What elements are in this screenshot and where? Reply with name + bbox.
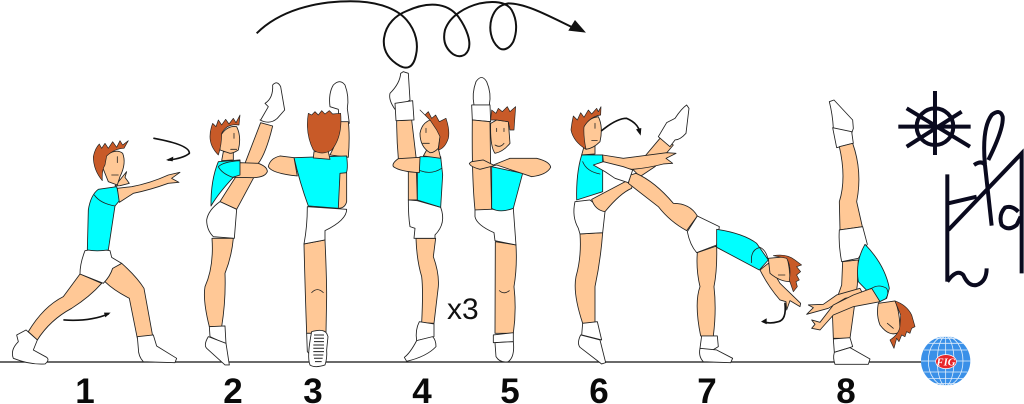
shorts [687,216,719,253]
facial lines [231,133,237,149]
sleeve seam [94,195,115,206]
hair [773,255,802,292]
far hand [115,172,129,186]
sock [582,322,602,340]
near arm [117,172,180,202]
standing foot [578,335,606,364]
back leg [28,274,102,340]
standing leg [697,246,717,336]
standing foot [404,337,436,361]
back shoe [12,330,48,364]
figure 1: lunge [12,138,189,364]
neck [313,152,330,159]
shorts [80,249,122,283]
raised thigh [592,177,633,212]
sock [209,326,226,344]
neck [582,145,595,155]
figure 2: leg raised, side view [204,83,285,365]
torso [492,167,523,211]
torso [294,156,347,208]
standing foot [205,337,229,365]
sock [472,105,491,122]
figure 5: front view with raised leg [469,77,551,362]
facial lines [112,157,118,175]
torso [717,229,768,270]
figure 6: stepping forward with raised leg [571,105,689,364]
raised leg [220,123,273,209]
turn arrow [602,118,641,136]
sock [700,336,718,352]
torso [857,244,889,302]
sock [395,101,414,121]
arm [760,263,801,310]
facial lines [423,128,429,143]
shorts [304,207,347,244]
FIG globe logo [921,336,970,386]
face [102,151,124,185]
standing leg [495,242,516,333]
raised leg [628,173,697,231]
facial line [887,323,893,328]
raised foot [473,77,490,105]
arm [233,163,267,178]
face [768,257,790,282]
knee line [312,290,323,293]
back of head [307,111,341,153]
hair [890,301,915,348]
hair [420,110,449,150]
standing leg [575,233,603,323]
near arm [812,288,880,330]
sock [493,333,513,343]
symbol: crossed wheel [898,91,971,155]
figure 4: side view with raised leg [390,72,449,361]
front leg [105,263,153,338]
hair [571,107,601,149]
raised leg [472,120,492,210]
upper foot [829,100,853,133]
raised leg [330,122,349,157]
hand rotation arrow [761,303,785,324]
far arm [807,288,863,314]
arm [393,157,420,173]
sleeve seam [583,162,600,174]
raised leg [397,120,417,200]
raised foot [593,162,633,183]
ground line [0,361,925,363]
shorts [574,200,605,234]
standing leg [204,238,233,327]
face [877,301,900,334]
shorts [408,200,443,238]
face [420,120,440,153]
shoe sole [309,330,328,367]
raised foot [330,82,349,123]
front shoe [137,335,177,363]
face [491,120,510,153]
raised foot [390,72,410,109]
torso [417,157,443,207]
raised leg [839,143,862,230]
torso [211,160,240,206]
facial lines [495,128,504,146]
FIG globe logo: FIG [936,358,956,369]
repetition label: x3 [447,293,479,326]
standing foot [700,348,733,363]
sock [833,128,853,148]
sleeve [751,247,768,263]
figure 8: handstand forming [807,100,915,364]
left arm [268,156,297,176]
facial line [778,274,785,276]
sleeve seam [871,286,888,298]
raised shin [633,138,673,177]
face [582,117,601,149]
figure 3: leg raised, back view [268,82,349,367]
somersault spiral arrow [257,1,586,68]
sleeve [218,161,240,177]
neck [222,152,233,161]
twist arrow lower [64,313,111,320]
arm [603,153,676,169]
facial lines [592,123,597,141]
step numbers [75,372,856,404]
sock [416,322,434,341]
torso [87,187,120,251]
figure 7: bending forward [593,162,802,363]
raised foot [260,83,285,122]
shorts [207,202,237,238]
sleeve seam [420,168,442,172]
standing leg [416,238,438,323]
arms [469,158,551,177]
hair [93,141,128,181]
shorts [475,208,516,245]
shorts [839,227,867,262]
standing foot [834,348,870,364]
sock [307,333,312,357]
hair [210,115,240,155]
standing leg [304,240,327,333]
twist arrow upper [154,138,189,161]
standing foot [495,342,514,362]
right arm [338,173,347,208]
torso [577,155,603,200]
symbol: handwritten element notation [947,112,1022,285]
face [220,126,240,153]
raised foot [658,105,689,147]
knee line [499,291,509,293]
sock [833,338,853,352]
hair [491,107,516,130]
neck [423,148,441,158]
standing leg [832,260,858,338]
